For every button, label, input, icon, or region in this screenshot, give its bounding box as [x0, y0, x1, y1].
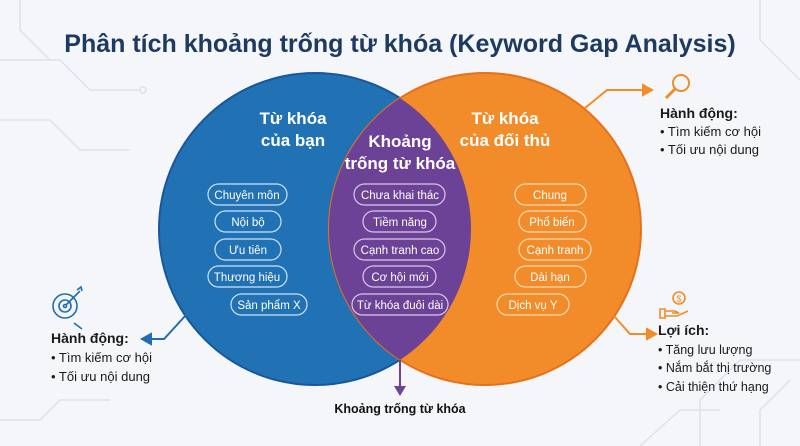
icon: money hand: [660, 292, 688, 318]
callout: right action: Hành động:: [660, 105, 738, 121]
arrow left: [142, 315, 186, 344]
text: trống từ khóa: [345, 154, 456, 173]
callout: benefits: • Tăng lưu lượng: [658, 342, 752, 356]
pills gap: Cạnh tranh cao: [361, 245, 439, 257]
pills left: Ưu tiên: [229, 245, 267, 257]
venn: gap lens: [329, 98, 471, 360]
pills left: Nội bộ: [231, 217, 265, 229]
heading left circle: Từ khóa: [259, 109, 327, 128]
callout: benefits: Lợi ích:: [658, 322, 709, 338]
pills gap: [352, 184, 448, 315]
pills gap: Chưa khai thác: [361, 190, 439, 202]
arrow bottom: [394, 360, 406, 396]
arrow bottom right: [614, 316, 656, 339]
heading gap: Khoảng: [368, 132, 432, 151]
pills left: Thương hiệu: [214, 272, 280, 284]
pills right: Chung: [533, 190, 567, 202]
pills gap: Tiềm năng: [373, 217, 427, 229]
pills right: Dài hạn: [530, 272, 570, 284]
callout: right action: • Tìm kiếm cơ hội: [660, 124, 761, 139]
venn: competitor keywords: [329, 73, 641, 385]
arrow top right: [585, 85, 652, 108]
callout: right action: [660, 105, 761, 157]
pills right: [497, 184, 591, 315]
pills right: Cạnh tranh: [527, 245, 583, 257]
label bottom: Khoảng trống từ khóa: [334, 402, 467, 416]
pills right: Phổ biến: [529, 217, 575, 229]
title: Phân tích khoảng trống từ khóa (Keyword Gap Analysis): [64, 30, 736, 58]
text: của đối thủ: [460, 131, 550, 150]
callout: left action: [51, 330, 152, 384]
venn: your keywords: [159, 73, 471, 385]
callout: benefits: • Nắm bắt thị trường: [658, 361, 771, 375]
callout: left action: Hành động:: [51, 330, 129, 346]
text: của bạn: [261, 131, 325, 150]
callout: right action: • Tối ưu nội dung: [660, 142, 759, 157]
icon: target: [53, 287, 82, 329]
heading right circle: Từ khóa: [471, 109, 539, 128]
callout: benefits: [658, 322, 771, 394]
pills left: Chuyên môn: [214, 190, 280, 202]
pills gap: Từ khóa đuôi dài: [357, 300, 443, 312]
icon: magnifier: [666, 75, 689, 98]
pills right: Dịch vụ Y: [508, 300, 558, 312]
icon: money hand: $: [676, 294, 682, 304]
callout: left action: • Tối ưu nội dung: [51, 369, 150, 384]
callout: left action: • Tìm kiếm cơ hội: [51, 350, 152, 365]
callout: benefits: • Cải thiện thứ hạng: [658, 380, 769, 394]
pills left: Sản phẩm X: [237, 300, 301, 312]
pills left: [208, 184, 307, 315]
pills gap: Cơ hội mới: [371, 272, 429, 284]
